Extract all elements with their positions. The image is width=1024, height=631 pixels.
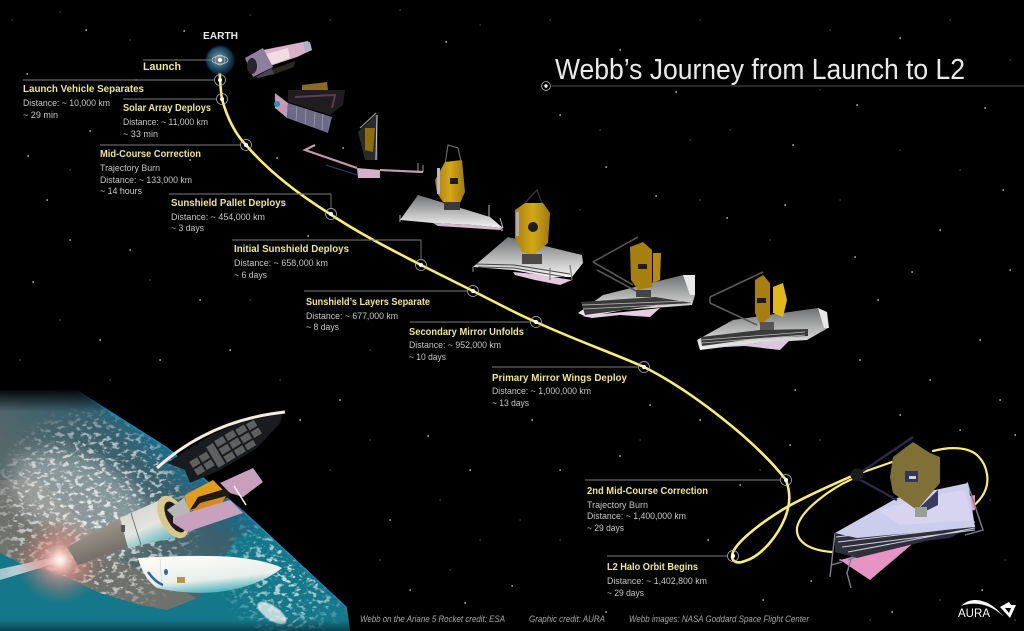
stage: solar array deploys: Solar Array Deploys <box>123 102 211 114</box>
upper fairing half <box>157 412 285 483</box>
stage: sunshield pallet deploys: Distance: ~ 454,000 km <box>171 212 265 223</box>
credits: Webb images: NASA Goddard Space Flight Center <box>629 614 810 624</box>
telescope: solar array deployed <box>274 82 345 133</box>
credits: Webb on the Ariane 5 Rocket credit: ESA <box>360 614 505 624</box>
stage: mid-course correction <box>100 140 252 197</box>
stage: 2nd mid-course correction: 2nd Mid-Course Correction <box>587 485 708 497</box>
earth limb and atmosphere <box>0 380 350 631</box>
stage: 2nd mid-course correction: Trajectory Burn <box>587 500 648 511</box>
AURA logo <box>958 600 1016 620</box>
telescope: pallet deploying <box>305 113 423 178</box>
stage: initial sunshield deploys <box>232 240 426 281</box>
stage: initial sunshield deploys: ~ 6 days <box>234 270 267 281</box>
stage: 2nd mid-course correction <box>585 474 792 534</box>
telescope: sunshield layers separated <box>578 237 695 318</box>
earth <box>203 31 238 74</box>
stage: initial sunshield deploys: Distance: ~ 658,000 km <box>234 258 328 269</box>
stage: launch vehicle separates: Distance: ~ 10,000 km <box>23 98 110 109</box>
telescope: sunshield initial <box>473 190 583 285</box>
stage: launch vehicle separates: ~ 29 min <box>23 110 58 121</box>
stage: solar array deploys <box>123 94 228 140</box>
stage: L2 halo orbit begins: ~ 29 days <box>607 588 644 599</box>
stage: primary mirror wings deploy: Primary Mirror Wings Deploy <box>492 372 627 384</box>
stage: secondary mirror unfolds: Secondary Mirror Unfolds <box>409 326 524 338</box>
rocket engine glow <box>0 516 104 604</box>
stage: 2nd mid-course correction: ~ 29 days <box>587 523 624 534</box>
trajectory <box>219 60 987 562</box>
credits <box>360 614 810 624</box>
stage: mid-course correction: Distance: ~ 133,000 km <box>100 175 192 186</box>
stage: launch vehicle separates: Launch Vehicle Separates <box>23 83 144 95</box>
rocket body <box>67 491 195 565</box>
stage: primary mirror wings deploy: Distance: ~ 1,000,000 km <box>492 386 591 397</box>
telescope: stowed <box>245 41 312 78</box>
credits: Graphic credit: AURA <box>529 614 605 624</box>
earth: EARTH <box>203 31 238 42</box>
stage: mid-course correction: Trajectory Burn <box>100 163 160 174</box>
stage: sunshield pallet deploys <box>169 194 336 234</box>
stage: sunshield pallet deploys: ~ 3 days <box>171 223 204 234</box>
rocket illustration panel <box>0 380 350 631</box>
telescope: pallet deployed <box>400 145 503 230</box>
stage: sunshield's layers separate: Distance: ~ 677,000 km <box>306 311 398 322</box>
stage: sunshield pallet deploys: Sunshield Pallet Deploys <box>171 197 286 209</box>
stage: secondary mirror unfolds: Distance: ~ 952,000 km <box>409 340 501 351</box>
stage: sunshield's layers separate <box>304 286 478 333</box>
stage: L2 halo orbit begins: L2 Halo Orbit Begins <box>607 561 698 573</box>
stage: launch <box>143 60 218 73</box>
stage: primary mirror wings deploy: ~ 13 days <box>492 398 529 409</box>
stage: 2nd mid-course correction: Distance: ~ 1,400,000 km <box>587 511 686 522</box>
stage: solar array deploys: Distance: ~ 11,000 km <box>123 117 208 128</box>
ocean <box>0 525 350 631</box>
stage: sunshield's layers separate: ~ 8 days <box>306 322 339 333</box>
telescope: fully deployed at L2 <box>830 437 983 588</box>
stage: mid-course correction: ~ 14 hours <box>100 186 142 197</box>
stage: mid-course correction: Mid-Course Correction <box>100 148 201 160</box>
stage: launch vehicle separates <box>23 74 226 121</box>
stage: solar array deploys: ~ 33 min <box>123 129 158 140</box>
stage: initial sunshield deploys: Initial Sunshield Deploys <box>234 243 349 255</box>
stage: secondary mirror unfolds <box>409 316 542 363</box>
stage: L2 halo orbit begins: Distance: ~ 1,402,800 km <box>607 576 707 587</box>
stage: L2 halo orbit begins <box>607 550 738 599</box>
lower fairing half <box>138 556 282 593</box>
stage: primary mirror wings deploy <box>492 362 650 409</box>
stage: launch: Launch <box>143 61 181 73</box>
title: Webb’s Journey from Launch to L2 <box>555 54 965 86</box>
stage: sunshield's layers separate: Sunshield’s Layers Separate <box>306 296 430 308</box>
telescope payload <box>167 468 263 532</box>
telescope: mirror wings deploying <box>697 272 829 350</box>
AURA logo: AURA <box>958 606 990 620</box>
stage: secondary mirror unfolds: ~ 10 days <box>409 352 446 363</box>
